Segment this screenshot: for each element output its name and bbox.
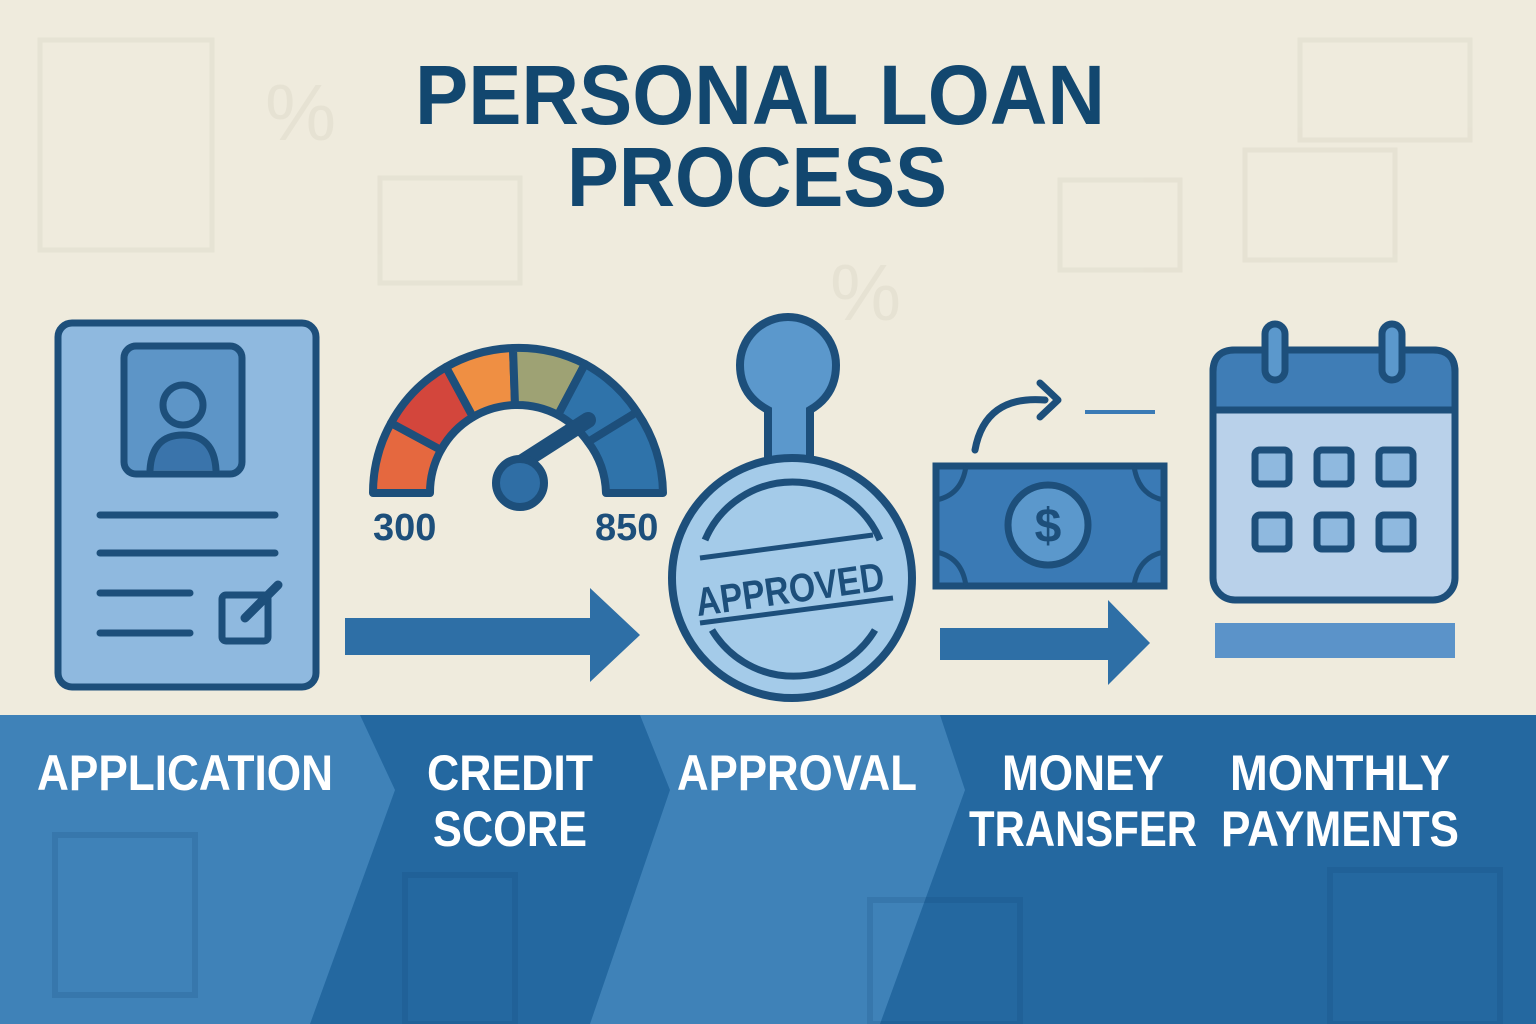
icon: money transfer: $ bbox=[1035, 500, 1062, 553]
arrow 1 bbox=[345, 588, 640, 682]
step labels: PAYMENTS bbox=[1221, 801, 1459, 857]
gauge labels: 300 bbox=[373, 507, 436, 549]
calendar bar bbox=[1215, 623, 1455, 658]
icon: approved stamp: APPROVED bbox=[693, 555, 887, 625]
step labels bbox=[37, 745, 1459, 857]
infographic: % bbox=[830, 248, 901, 337]
icon: money transfer bbox=[936, 383, 1164, 586]
step labels: MONEY bbox=[1002, 745, 1164, 801]
icon: application form bbox=[58, 323, 316, 687]
step labels: APPLICATION bbox=[37, 745, 333, 801]
icon: calendar bbox=[1213, 324, 1455, 600]
title: PERSONAL LOAN bbox=[415, 48, 1105, 142]
bottom band bbox=[0, 715, 1536, 1024]
title: PROCESS bbox=[567, 130, 947, 224]
icon: credit score gauge bbox=[373, 348, 663, 507]
gauge labels bbox=[373, 507, 658, 549]
step labels: SCORE bbox=[433, 801, 587, 857]
title bbox=[415, 48, 1105, 224]
infographic: % bbox=[265, 68, 336, 157]
icon: approved stamp bbox=[672, 317, 912, 698]
step labels: CREDIT bbox=[427, 745, 593, 801]
step labels: TRANSFER bbox=[969, 801, 1197, 857]
gauge labels: 850 bbox=[595, 507, 658, 549]
step labels: APPROVAL bbox=[677, 745, 917, 801]
arrow 2 bbox=[940, 600, 1150, 685]
step labels: MONTHLY bbox=[1230, 745, 1450, 801]
